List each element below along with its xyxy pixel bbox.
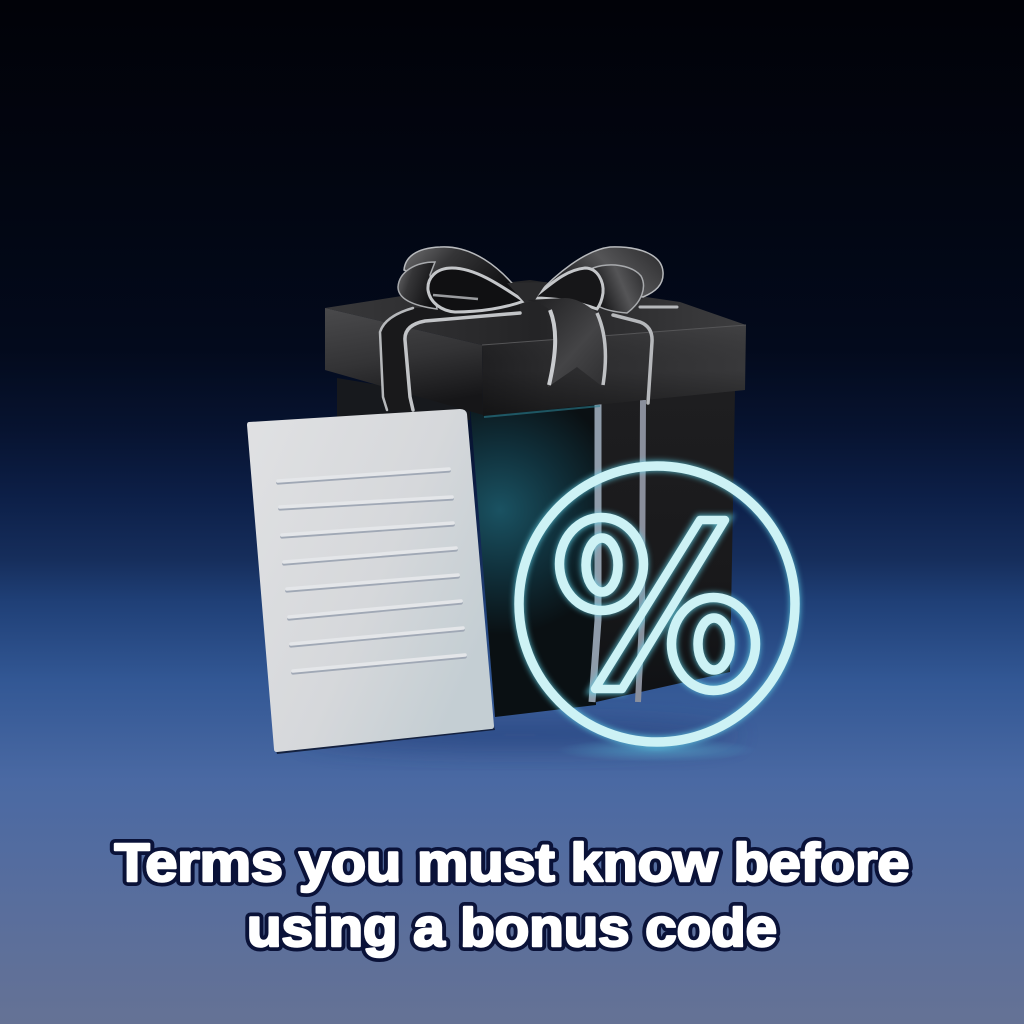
knot [507, 282, 547, 303]
left front loop [428, 268, 524, 312]
paper sheet [247, 409, 494, 752]
ring [519, 466, 795, 742]
right front loop [533, 268, 603, 309]
right back loop [537, 247, 663, 297]
title outline: Terms you must know before [114, 833, 910, 893]
title outline: using a bonus code [247, 898, 777, 958]
left front band [398, 262, 437, 309]
left inner highlight [433, 295, 478, 299]
percent badge [519, 466, 795, 762]
text lines [278, 469, 465, 673]
box shadow [300, 719, 740, 751]
title outline [114, 833, 910, 958]
box body [337, 378, 735, 717]
title fill: Terms you must know before [114, 833, 910, 893]
title fill [114, 833, 910, 958]
title fill: using a bonus code [247, 898, 777, 958]
crisp outline [519, 466, 795, 742]
paper shadow edge [276, 726, 495, 754]
slash [595, 520, 725, 689]
line highlights [278, 469, 465, 671]
document [247, 409, 495, 754]
right front band [593, 265, 643, 313]
title [114, 833, 910, 958]
bow tail [527, 298, 605, 387]
left back loop [404, 247, 523, 297]
teal rim under lid [484, 406, 600, 417]
bow [398, 247, 663, 387]
lid [325, 280, 746, 416]
floor glow [557, 738, 757, 762]
gift box [300, 247, 746, 751]
line shadows [278, 471, 465, 673]
lower zero [672, 598, 756, 690]
ribbons on box body [592, 400, 643, 702]
dark band [380, 302, 520, 410]
upper zero [560, 518, 644, 610]
glow blur [519, 466, 795, 742]
ribbons on lid [380, 302, 677, 410]
